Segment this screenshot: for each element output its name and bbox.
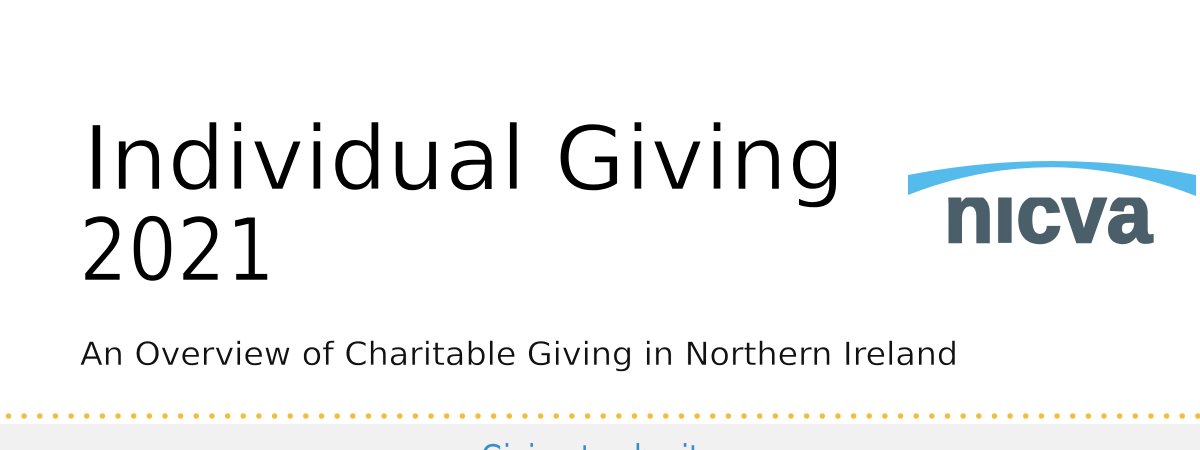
logo wordmark: nicva (944, 166, 1153, 260)
title: Individual Giving (83, 106, 845, 210)
icon: nicva logo (908, 161, 1196, 244)
title (79, 106, 845, 302)
logo arc (908, 161, 1196, 196)
title: 2021 (79, 200, 275, 302)
dotted divider (8, 413, 1200, 419)
panel: next section background (0, 424, 1200, 450)
subtitle: An Overview of Charitable Giving in Northern Ireland (80, 335, 958, 373)
